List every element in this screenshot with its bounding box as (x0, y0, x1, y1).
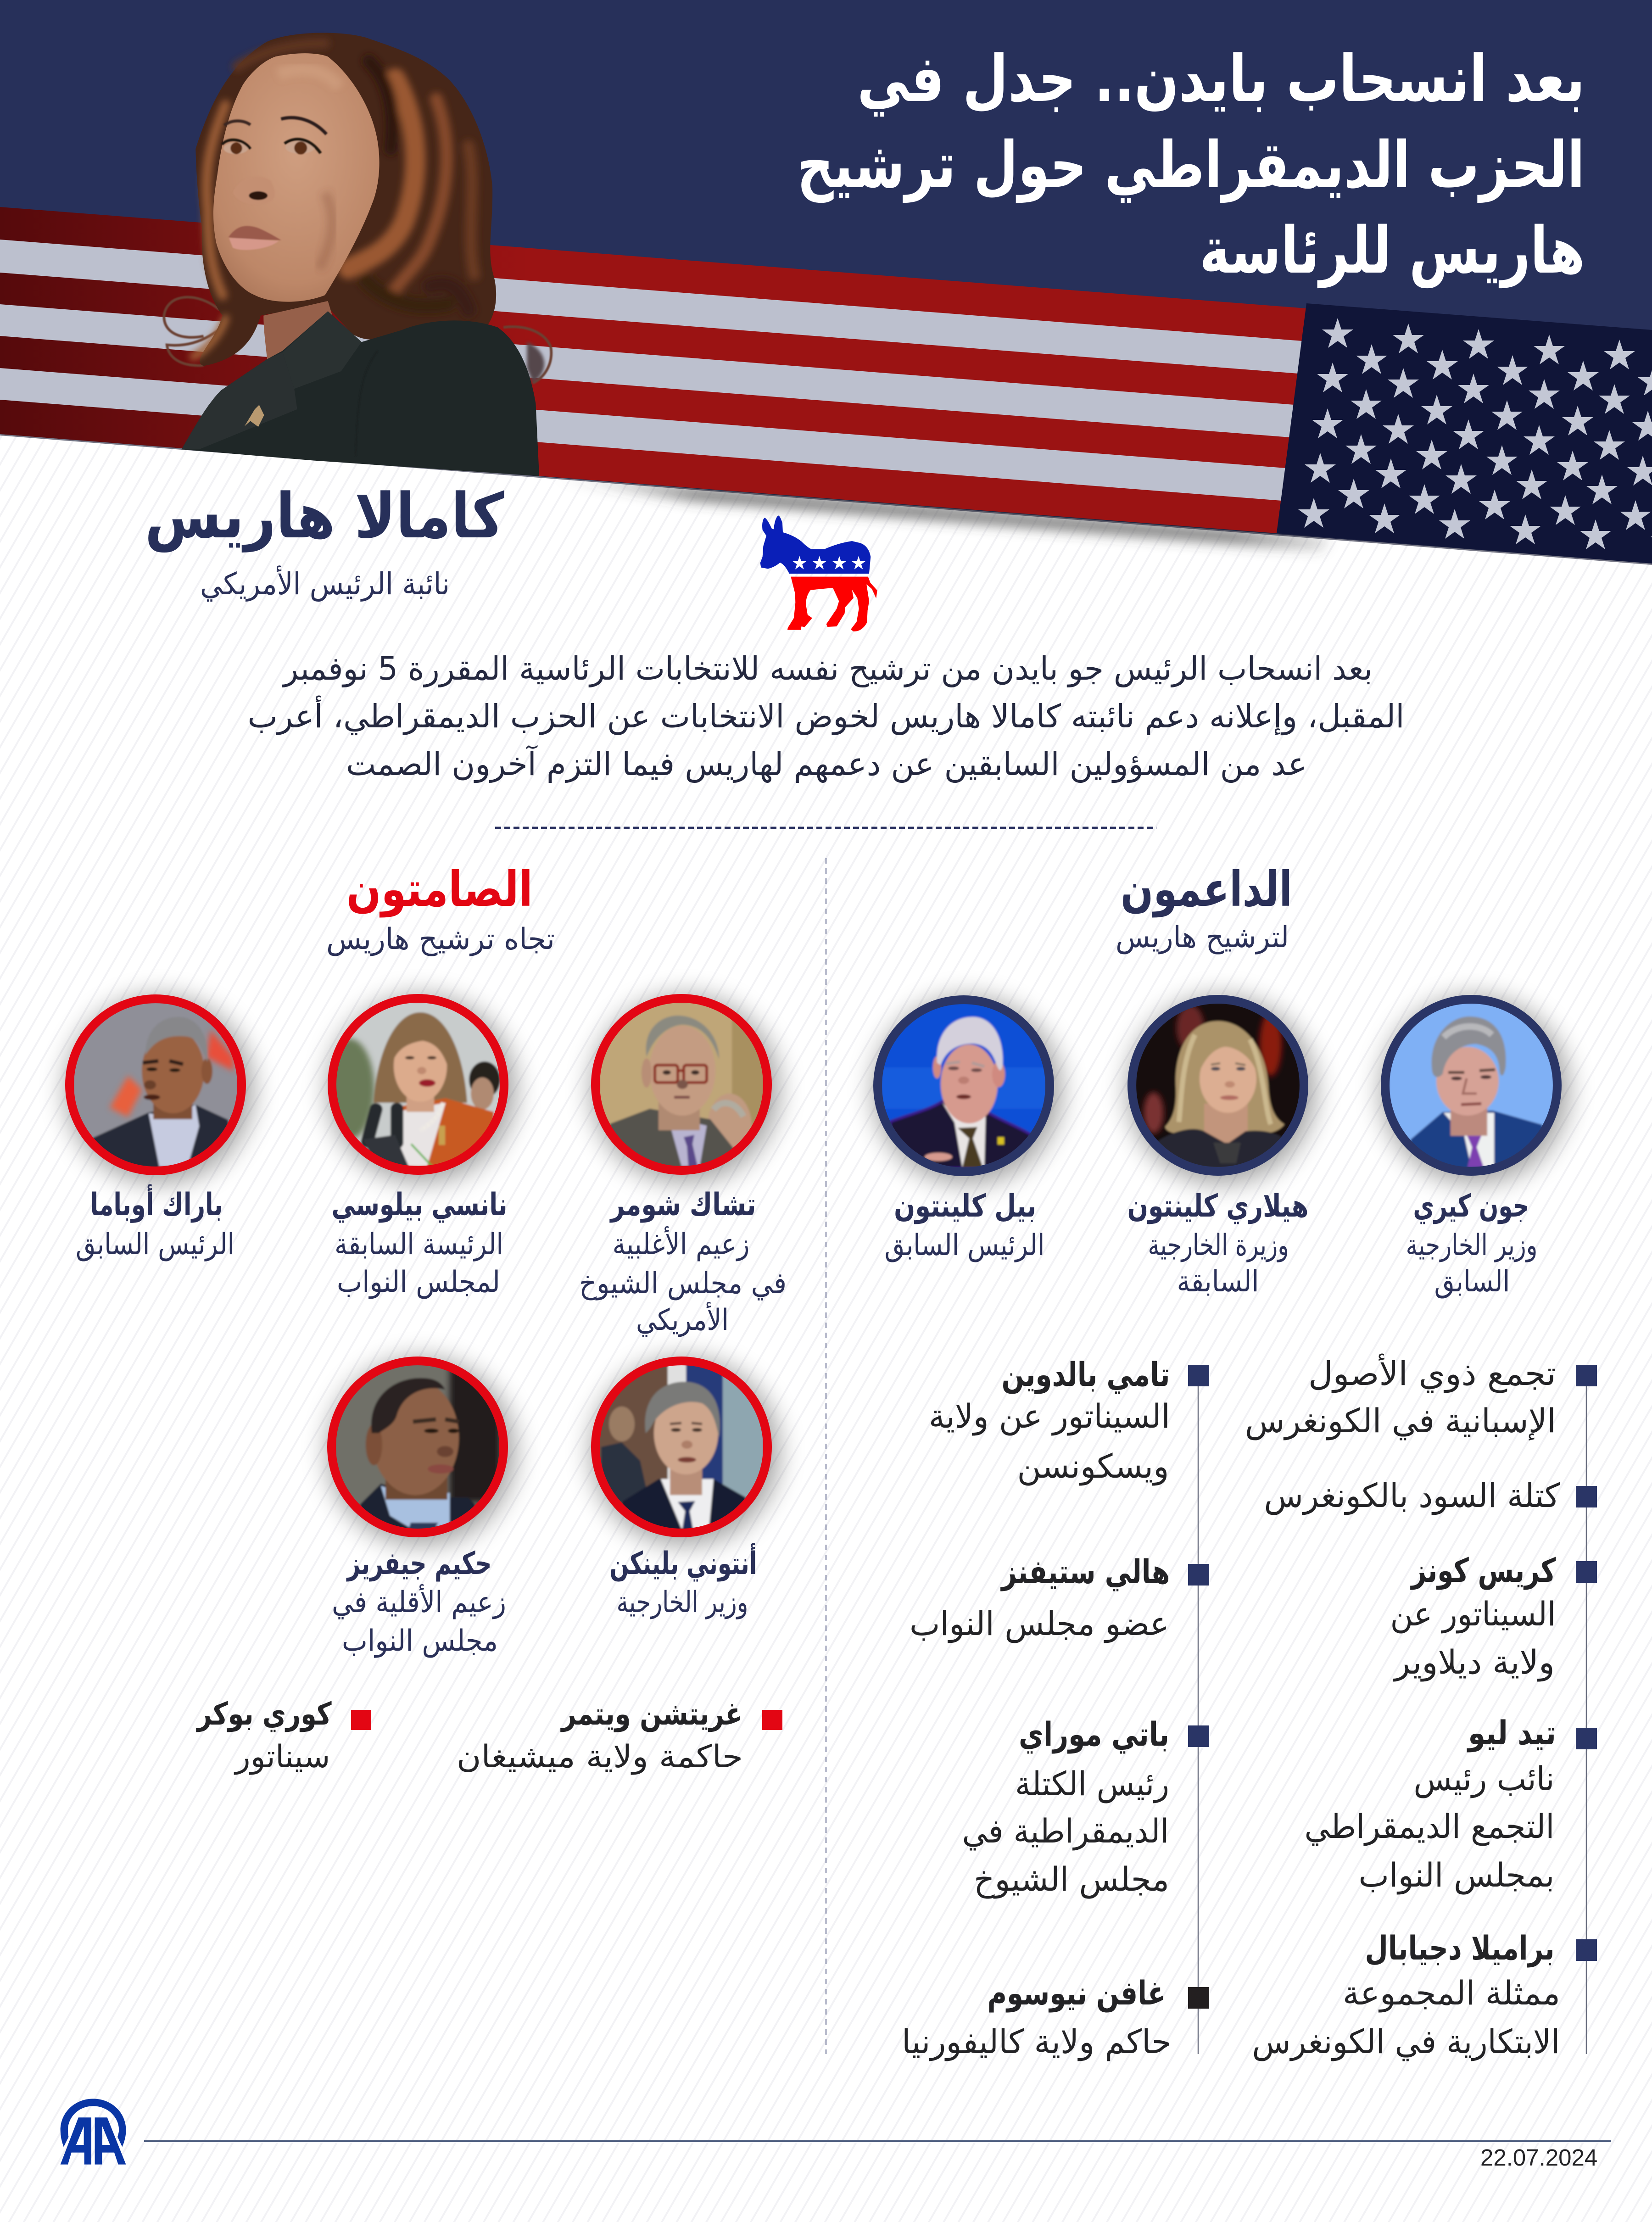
name block: Kamala Harris: نائبة الرئيس الأمريكي (200, 565, 450, 602)
name: Antony Blinken: أنتوني بلينكن (609, 1543, 757, 1582)
white diagonal base edge (0, 434, 1652, 565)
list item: Tammy Baldwin: ويسكونسن (1017, 1447, 1169, 1486)
intro paragraph: بعد انسحاب الرئيس جو بايدن من ترشيح نفسه للانتخابات الرئاسية المقررة 5 نوفمبر (282, 650, 1373, 687)
bullet: Cory Booker: سيناتور (234, 1739, 330, 1775)
name: Barack Obama (76, 1184, 234, 1262)
list item: Gavin Newsom: حاكم ولاية كاليفورنيا (902, 2022, 1172, 2061)
portrait: Nancy Pelosi (324, 994, 516, 1183)
list item: Patty Murray (962, 1715, 1169, 1899)
name block: Kamala Harris: كامالا هاريس (145, 480, 504, 553)
name: Chuck Schumer (579, 1187, 787, 1337)
name: Nancy Pelosi: لمجلس النواب (337, 1265, 500, 1299)
list item: Pramila Jayapal: ممثلة المجموعة (1343, 1974, 1560, 2013)
list item: Patty Murray: باتي موراي (1019, 1715, 1169, 1754)
list item: Hispanic caucus: الإسبانية في الكونغرس (1245, 1401, 1556, 1440)
flag stripes (0, 207, 1306, 533)
bullet: Cory Booker (196, 1696, 371, 1775)
name: Chuck Schumer: في مجلس الشيوخ (579, 1267, 787, 1301)
list item: Patty Murray: مجلس الشيوخ (974, 1860, 1169, 1899)
intro paragraph: عد من المسؤولين السابقين عن دعمهم لهاريس فيما التزم آخرون الصمت (346, 745, 1307, 783)
heading: supporters: لترشيح هاريس (1116, 921, 1289, 955)
heading: silent: الصامتون (346, 861, 533, 918)
name: Barack Obama: باراك أوباما (90, 1184, 223, 1223)
intro paragraph (248, 650, 1404, 783)
portrait: John Kerry (1381, 995, 1569, 1184)
portrait: Chuck Schumer (591, 994, 779, 1183)
name: Chuck Schumer: زعيم الأغلبية (612, 1226, 750, 1262)
list item: Ted Lieu: التجمع الديمقراطي (1304, 1807, 1555, 1846)
name: John Kerry: السابق (1434, 1265, 1510, 1299)
list item: Tammy Baldwin: السيناتور عن ولاية (929, 1397, 1170, 1436)
list item: Chris Coons: ولاية ديلاوير (1393, 1643, 1555, 1682)
bullet: Gretchen Whitmer: حاكمة ولاية ميشيغان (457, 1739, 743, 1775)
portrait: Hakeem Jeffries (327, 1357, 515, 1546)
flag shadow (551, 477, 1331, 551)
name: Hillary Clinton: هيلاري كلينتون (1127, 1188, 1309, 1224)
name: Bill Clinton: الرئيس السابق (885, 1228, 1044, 1262)
heading: supporters: الداعمون (1121, 861, 1292, 918)
portrait: Bill Clinton (873, 995, 1061, 1184)
name: Antony Blinken (609, 1543, 757, 1619)
name: Hillary Clinton: السابقة (1177, 1265, 1259, 1299)
name: Chuck Schumer: الأمريكي (636, 1301, 729, 1337)
name: Hakeem Jeffries: مجلس النواب (342, 1624, 498, 1658)
list item: Ted Lieu: بمجلس النواب (1358, 1856, 1555, 1895)
heading: supporters (1116, 861, 1292, 955)
name: John Kerry: وزير الخارجية (1406, 1228, 1537, 1262)
name: Hakeem Jeffries: حكيم جيفريز (346, 1546, 492, 1582)
heading: silent (326, 861, 555, 956)
name: Nancy Pelosi: الرئيسة السابقة (335, 1228, 503, 1262)
list item: Pramila Jayapal (1252, 1929, 1560, 2061)
list item: Black caucus: كتلة السود بالكونغرس (1264, 1476, 1560, 1515)
portrait: Antony Blinken (591, 1357, 779, 1546)
intro paragraph: المقبل، وإعلانه دعم نائبته كامالا هاريس لخوض الانتخابات عن الحزب الديمقراطي، أعرب (248, 695, 1404, 736)
name: Hakeem Jeffries (332, 1546, 506, 1658)
list item: Tammy Baldwin: تامي بالدوين (1001, 1355, 1170, 1394)
list item: Chris Coons (1390, 1551, 1556, 1682)
list item: Ted Lieu (1304, 1714, 1556, 1895)
list item: Gavin Newsom: غافن نيوسوم (988, 1974, 1166, 2013)
heading: silent: تجاه ترشيح هاريس (326, 922, 555, 956)
list item: Pramila Jayapal: براميلا دجيابال (1365, 1929, 1555, 1968)
portrait: Hillary Clinton (1127, 995, 1316, 1184)
portrait: Kamala Harris (164, 33, 551, 476)
list item: Chris Coons: كريس كونز (1410, 1551, 1556, 1590)
name: Antony Blinken: وزير الخارجية (617, 1586, 748, 1619)
header navy background (0, 0, 1652, 564)
list item: Gavin Newsom (902, 1974, 1172, 2061)
list item: Ted Lieu: تيد ليو (1467, 1714, 1556, 1753)
name: John Kerry: جون كيري (1413, 1188, 1529, 1224)
icon: Anadolu Agency logo (61, 2099, 126, 2165)
name: John Kerry (1406, 1188, 1537, 1299)
left list timeline (1188, 1365, 1209, 2054)
list item: Hispanic caucus: تجمع ذوي الأصول (1308, 1353, 1556, 1393)
list item: Patty Murray: الديمقراطية في (962, 1812, 1169, 1851)
name block: Kamala Harris (145, 480, 504, 602)
right list timeline (1576, 1365, 1597, 2054)
bullet: Cory Booker: كوري بوكر (196, 1696, 332, 1732)
list item: Haley Stevens: عضو مجلس النواب (910, 1604, 1169, 1643)
name: Bill Clinton (885, 1188, 1044, 1262)
icon: Democratic donkey (760, 515, 877, 631)
list item: Patty Murray: رئيس الكتلة (1015, 1764, 1169, 1803)
bullet: Gretchen Whitmer (457, 1696, 782, 1775)
name: Nancy Pelosi: نانسي بيلوسي (331, 1187, 508, 1223)
name: Hillary Clinton (1127, 1188, 1309, 1299)
portrait: Barack Obama (65, 994, 253, 1184)
bullet: Gretchen Whitmer: غريتشن ويتمر (560, 1696, 742, 1732)
list item: Chris Coons: السيناتور عن (1390, 1595, 1556, 1634)
name: Hakeem Jeffries: زعيم الأقلية في (332, 1584, 506, 1619)
date: 22.07.2024 (1480, 2144, 1597, 2171)
list item: Haley Stevens (910, 1552, 1170, 1643)
list item: Ted Lieu: نائب رئيس (1413, 1759, 1555, 1798)
title (797, 42, 1585, 288)
list item: Pramila Jayapal: الابتكارية في الكونغرس (1252, 2022, 1560, 2061)
name: Nancy Pelosi (331, 1187, 508, 1299)
name: Bill Clinton: بيل كلينتون (894, 1188, 1036, 1224)
name: Chuck Schumer: تشاك شومر (609, 1187, 756, 1223)
list item: Tammy Baldwin (929, 1355, 1170, 1486)
name: Barack Obama: الرئيس السابق (76, 1228, 234, 1262)
list item: Haley Stevens: هالي ستيفنز (1000, 1552, 1170, 1591)
flag canton with stars (1277, 303, 1652, 564)
name: Hillary Clinton: وزيرة الخارجية (1148, 1228, 1289, 1262)
list item: Hispanic caucus (1245, 1353, 1556, 1440)
